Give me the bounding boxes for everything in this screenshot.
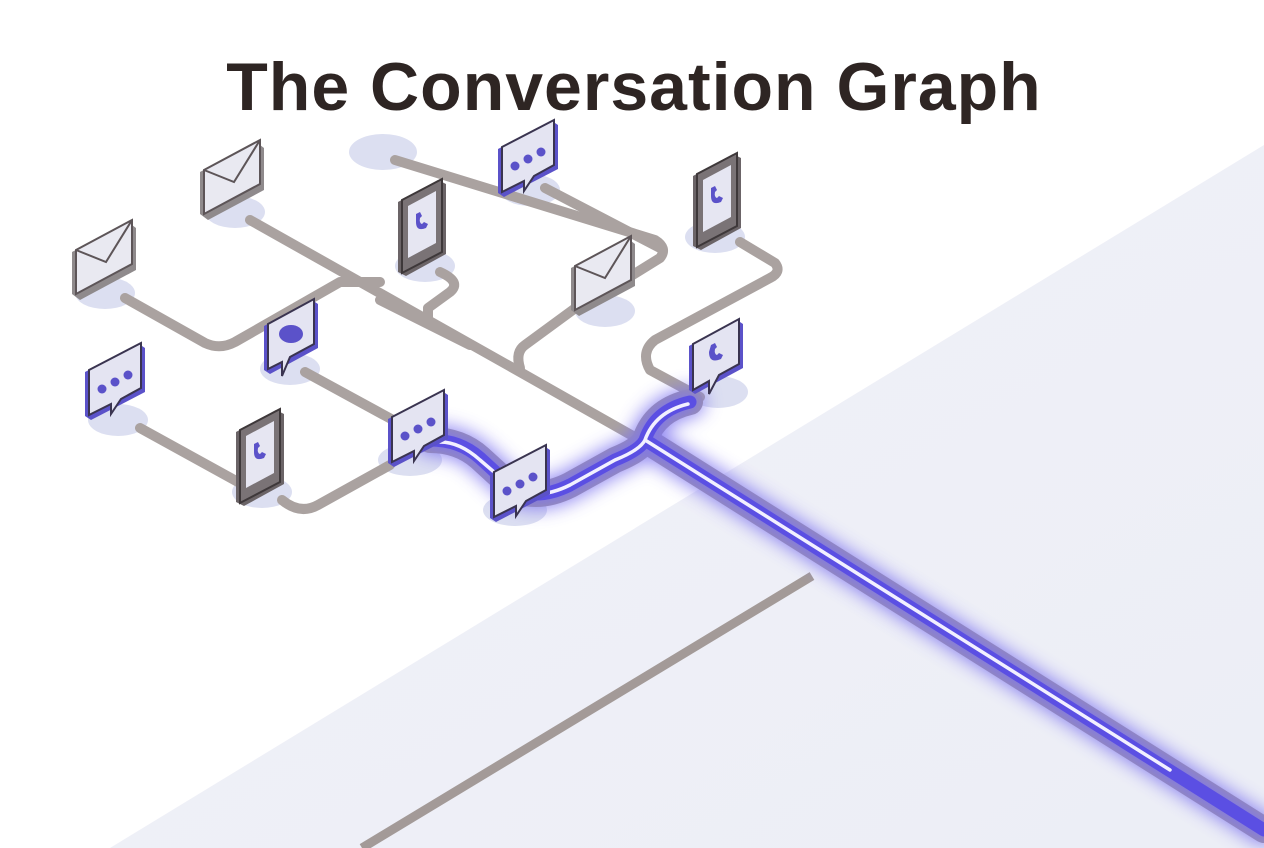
glowing path [430, 402, 1264, 830]
icon: chat glowing 1 [388, 390, 448, 467]
floor line [362, 576, 812, 848]
icon: phone right top [693, 153, 741, 250]
icon: envelope top [200, 140, 264, 220]
icon: envelope right [571, 236, 635, 316]
icon: chat glowing 2 [490, 445, 550, 522]
background plane [110, 145, 1264, 848]
node bases [75, 134, 748, 526]
icon: phone center top [398, 179, 446, 276]
icon: chat top [498, 120, 558, 197]
icon: speech bubble [264, 299, 318, 376]
icon: phone bottom left [236, 409, 284, 506]
icon: chat left [85, 343, 145, 420]
title: The Conversation Graph [226, 49, 1042, 125]
pipes network [125, 160, 1264, 830]
icon: envelope left [72, 220, 136, 300]
icon: chat call [689, 319, 743, 394]
